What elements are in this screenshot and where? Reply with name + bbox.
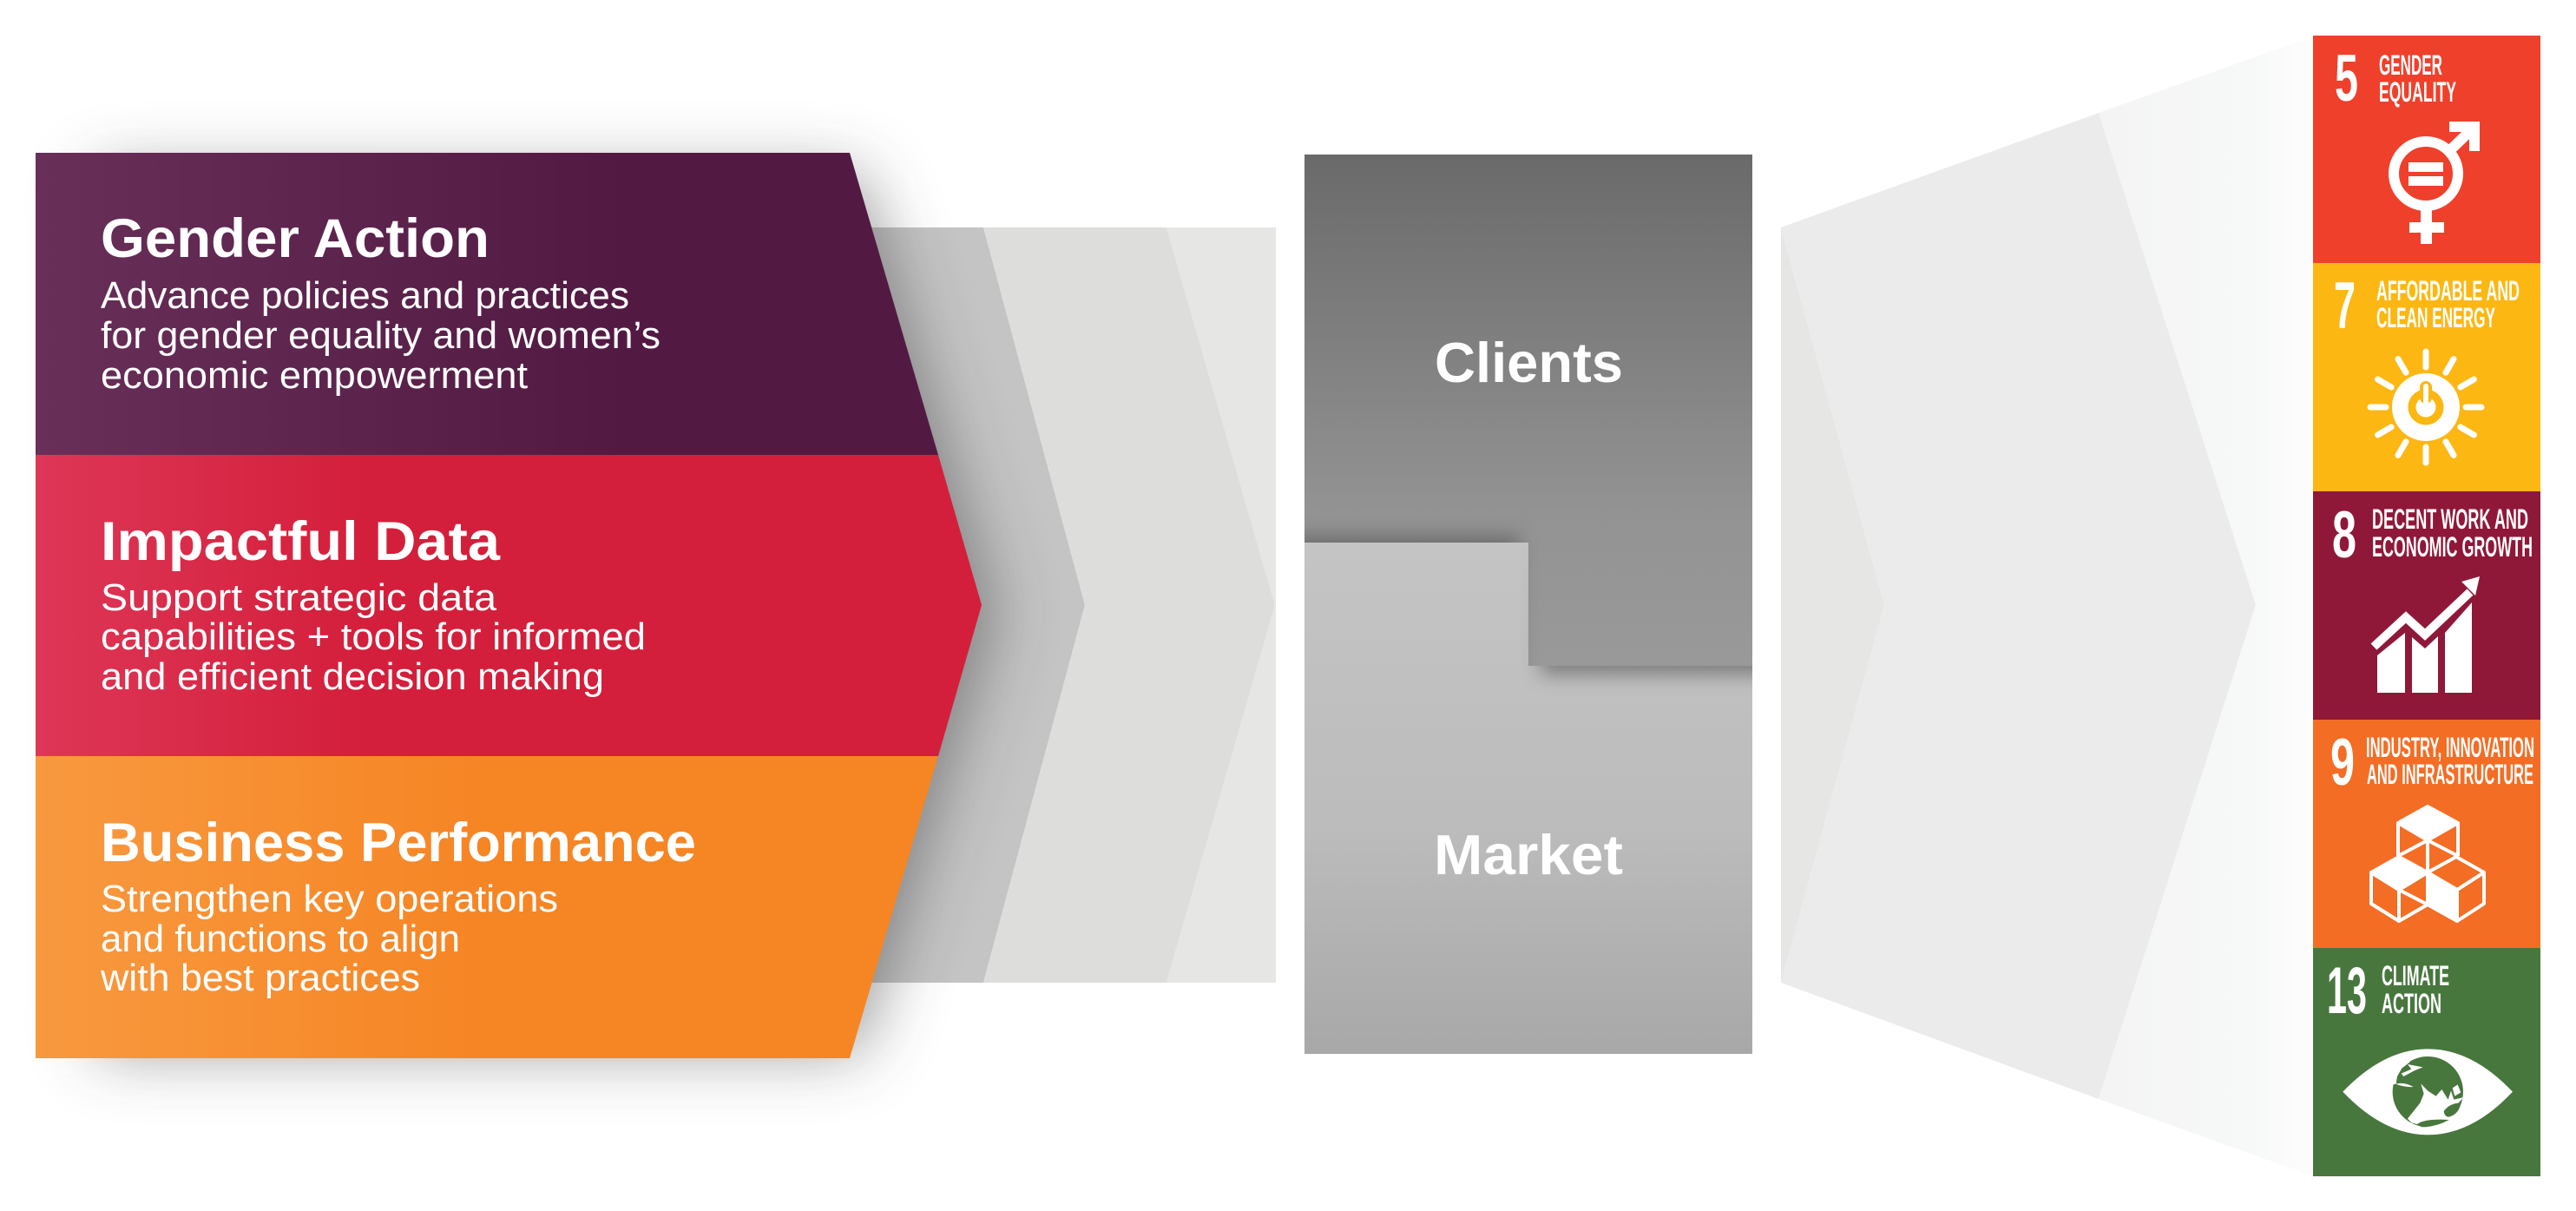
shadow cast on Market: [1531, 666, 1752, 685]
chevron band: outer: [1166, 227, 1276, 983]
icon: stacked cubes: [2371, 806, 2484, 921]
SDG 13: climate action: ACTION: [2382, 988, 2441, 1019]
label: Clients: Clients: [1435, 331, 1623, 394]
pillar: Gender Action: for gender equality and women’s: [101, 314, 660, 357]
SDG 13: climate action: [2313, 948, 2540, 1176]
panel: three pillars: [36, 153, 982, 1058]
SDG 13: climate action: 13: [2327, 954, 2367, 1028]
grey flow chevrons between pillars and beneficiaries: [95, 174, 1276, 1052]
funnel segment: right: [2099, 36, 2313, 1176]
block: Clients: [1304, 155, 1752, 666]
SDG 5: gender equality: EQUALITY: [2379, 76, 2456, 108]
SDG 5: gender equality: GENDER: [2379, 49, 2442, 81]
panel: Clients and Market: [1304, 155, 1752, 1054]
SDG 9: industry, innovation and infrastructure: [2313, 720, 2540, 948]
chevron band: middle: [983, 227, 1275, 983]
pillar: Gender Action: Advance policies and practices: [101, 274, 629, 317]
pillar: Business Performance: Business Performance: [101, 813, 696, 873]
pillar: Impactful Data: and efficient decision making: [101, 655, 604, 698]
pillar: Gender Action: Gender Action: [101, 208, 490, 269]
pillar: Business Performance: [36, 756, 938, 1058]
SDG 9: industry, innovation and infrastructure: 9: [2330, 726, 2355, 800]
block: Market: [1304, 543, 1752, 1054]
icon: gender equality symbol: [2394, 122, 2480, 244]
pillar: Business Performance: with best practices: [100, 957, 420, 999]
SDG 5: gender equality: 5: [2335, 42, 2358, 115]
pillar: Business Performance: and functions to align: [101, 918, 460, 960]
pillar: Impactful Data: [36, 455, 982, 756]
SDG 8: decent work and economic growth: [2313, 491, 2540, 720]
label: Market: Market: [1434, 823, 1623, 886]
icon: rising bar chart with arrow: [2374, 576, 2480, 693]
SDG 7: affordable and clean energy: 7: [2334, 269, 2356, 343]
shadow cast on Clients: [1304, 528, 1524, 543]
funnel widening toward SDGs: [1781, 36, 2313, 1176]
icon: sun with power symbol: [2370, 352, 2481, 463]
pillar: Gender Action: economic empowerment: [101, 354, 528, 397]
chevron band: inner: [833, 227, 1085, 983]
icon: eye with globe: [2343, 1049, 2513, 1135]
panel drop shadow: [95, 174, 995, 1052]
funnel segment: left: [1781, 227, 1884, 983]
pillar: Business Performance: Strengthen key operations: [101, 878, 558, 920]
pillar: Impactful Data: Impactful Data: [101, 511, 501, 572]
panel: SDG goals column: [2313, 36, 2540, 1176]
SDG 8: decent work and economic growth: 8: [2332, 498, 2356, 572]
pillar: Gender Action: [36, 153, 938, 455]
pillar: Impactful Data: capabilities + tools for informed: [101, 615, 646, 658]
funnel segment: middle: [1781, 113, 2256, 1099]
SDG 7: affordable and clean energy: [2313, 263, 2540, 491]
pillar: Impactful Data: Support strategic data: [101, 576, 497, 619]
SDG 5: gender equality: [2313, 36, 2540, 263]
SDG 13: climate action: CLIMATE: [2382, 960, 2449, 991]
